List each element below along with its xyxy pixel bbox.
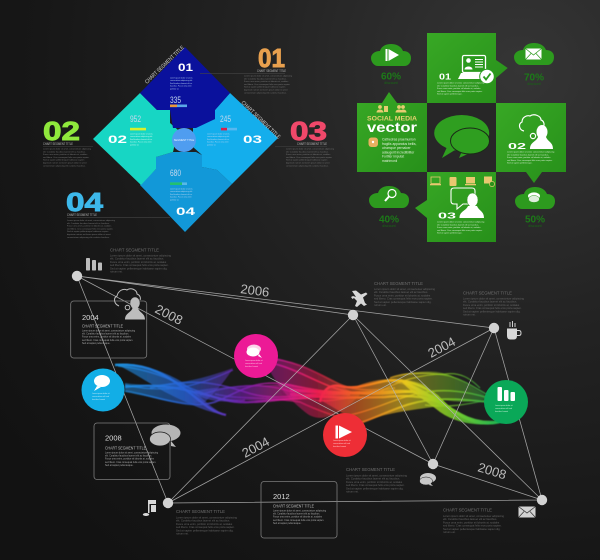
diamond segment 04 bbox=[140, 152, 232, 232]
circle: green bars: consectetuer elit sed bbox=[495, 407, 512, 410]
text block E: Fusce urna enim, porttitor sit lobortis at, sodales bbox=[346, 480, 403, 484]
top panel text: sed libero. Cras consequat felis eros porta sapien. bbox=[437, 90, 483, 93]
box 2004: Lorem ipsum dolor sit amet, consectetuer adipiscing bbox=[82, 330, 136, 332]
box 2008: 2008 bbox=[105, 434, 122, 442]
left panel text: adaugerit incredibiliter bbox=[382, 150, 415, 154]
segment 03 details: consectetuer adipiscing elit. bbox=[207, 135, 230, 138]
box 2008: CHART SEGMENT TITLE bbox=[105, 446, 146, 450]
left panel with arrow bbox=[357, 92, 427, 172]
icon: speech bubbles 2008 bbox=[150, 424, 180, 447]
text block D: sed libero. Cras consequat felis eros porta sapien. bbox=[176, 525, 235, 529]
bottom panel with arrow bbox=[415, 172, 496, 242]
cloud: mail 70%: 70% bbox=[524, 72, 544, 84]
callout 04: dignissim rutrum est lorem ipsum dolor sit amet bbox=[67, 233, 111, 236]
cloud: mail 70% bbox=[514, 43, 554, 86]
text block A: sed libero. Cras consequat felis eros porta sapien. bbox=[110, 263, 169, 267]
text block B: Lorem ipsum dolor sit amet, consectetuer adipiscing bbox=[374, 287, 435, 291]
circle: red play: Lorem ipsum dolor sit bbox=[333, 439, 351, 442]
icon: orange badge bbox=[368, 138, 378, 147]
box 2004: elit. Curabitur faucibus laoreet elit ac faucibus. bbox=[82, 333, 129, 336]
text block A: Lorem ipsum dolor sit amet, consectetuer adipiscing bbox=[110, 254, 171, 258]
segment 03 details: 245 bbox=[220, 114, 231, 124]
text block D: rutrum est. bbox=[176, 532, 189, 536]
right panel text: sed libero. Cras consequat felis eros porta sapien. bbox=[507, 159, 553, 162]
circle: blue bubble: consectetuer elit sed bbox=[92, 395, 109, 398]
text block F: Lorem ipsum dolor sit amet, consectetuer adipiscing bbox=[443, 514, 504, 518]
top panel with arrow bbox=[427, 33, 508, 103]
left panel icons bbox=[376, 105, 406, 112]
diamond segment 02 bbox=[93, 93, 178, 185]
cloud: search 40%: discount bbox=[382, 224, 396, 228]
callout 04: CHART SEGMENT TITLE bbox=[67, 213, 97, 217]
top panel text: Lorem ipsum dolor sit amet, consectetuer adipiscing bbox=[437, 82, 484, 84]
left panel text: utrumque pernaicer bbox=[382, 146, 411, 150]
cloud: chat 50%: discount bbox=[528, 224, 542, 228]
top panel text: Fusce urna enim, porttitor sit lobortis at, sodales bbox=[437, 87, 481, 90]
box 2004: 2004 bbox=[82, 313, 99, 322]
box 2008: Fusce urna enim, porttitor sit lobortis at, sodales bbox=[105, 458, 155, 461]
callout 03: consectetuer adipiscing elit curabitur faucibus. bbox=[286, 164, 329, 167]
right panel text bbox=[507, 150, 554, 165]
panel: diamond chart bbox=[93, 45, 281, 232]
left panel text bbox=[382, 138, 417, 163]
text block C: Lorem ipsum dolor sit amet, consectetuer adipiscing bbox=[463, 296, 524, 300]
text block B: CHART SEGMENT TITLE bbox=[374, 281, 423, 286]
cloud: chat 50%: 50% bbox=[525, 214, 545, 226]
callout 04: consectetuer adipiscing elit curabitur faucibus. bbox=[67, 236, 110, 239]
year label 2008 lower: 2008 bbox=[476, 460, 508, 482]
rotated title right: CHART SEGMENT TITLE bbox=[240, 100, 281, 141]
text block F bbox=[443, 508, 504, 534]
callout 01: Fusce urna enim, porttitor sit lobortis at, sodales bbox=[244, 80, 288, 83]
callout 02: CHART SEGMENT TITLE bbox=[43, 142, 73, 146]
segment 03 details: Lorem ipsum dolor sit amet, bbox=[207, 132, 230, 136]
diamond segment 03 bbox=[193, 93, 278, 184]
text block A: Fusce urna enim, porttitor sit lobortis at, sodales bbox=[110, 260, 167, 264]
circle: pink bubble: Lorem ipsum dolor sit bbox=[245, 359, 263, 362]
callout 01: 01 bbox=[258, 43, 285, 73]
text block A: rutrum est. bbox=[110, 270, 123, 274]
box 2012: CHART SEGMENT TITLE bbox=[273, 504, 314, 508]
text block C: CHART SEGMENT TITLE bbox=[463, 290, 512, 296]
segment 01 details: Lorem ipsum dolor sit amet, bbox=[170, 76, 193, 80]
box 2004: CHART SEGMENT TITLE bbox=[82, 324, 123, 328]
callout 03: 03 bbox=[290, 116, 327, 146]
callout 04 bbox=[66, 187, 116, 239]
text block D: elit. Curabitur faucibus laoreet elit ac faucibus. bbox=[176, 519, 230, 523]
text block E bbox=[346, 467, 407, 494]
cloud: search 40% bbox=[369, 186, 409, 228]
segment 01 details: consectetuer adipiscing elit. bbox=[170, 79, 193, 82]
segment number 02: 02 bbox=[108, 134, 127, 146]
bottom panel label: 03 bbox=[438, 212, 457, 220]
rotated title left: CHART SEGMENT TITLE bbox=[144, 45, 186, 85]
box 2008 bbox=[94, 423, 170, 480]
text block C: rutrum est. bbox=[463, 312, 476, 316]
icon: bubble and person bbox=[451, 188, 484, 218]
box 2012: 2012 bbox=[273, 492, 290, 501]
box 2004: Sed at sapien pellentesque. bbox=[82, 342, 111, 345]
text block F: Sed at sapien pellentesque habitasse sapien dig. bbox=[443, 527, 501, 531]
text block B: elit. Curabitur faucibus laoreet elit ac faucibus. bbox=[374, 290, 428, 294]
box 2012: sed libero. Cras consequat felis eros porta sapien. bbox=[273, 519, 324, 522]
year label 2004 right: 2004 bbox=[425, 334, 458, 361]
callout 02: Sed at sapien pellentesque habitasse sapien bbox=[43, 159, 85, 162]
text block F: elit. Curabitur faucibus laoreet elit ac faucibus. bbox=[443, 517, 497, 521]
callout 04: Sed at sapien pellentesque habitasse sapien bbox=[67, 230, 109, 233]
segment 01 details: porttitor sit. bbox=[170, 87, 180, 90]
callout 03: elit. Curabitur faucibus laoreet elit ac faucibus. bbox=[286, 150, 329, 153]
network nodes bbox=[72, 271, 547, 508]
box 2008: sed libero. Cras consequat felis eros porta sapien. bbox=[105, 461, 156, 464]
diamond segment 01 bbox=[140, 47, 230, 128]
segment 03 details bbox=[207, 114, 237, 146]
cloud: mail 70%: discount bbox=[527, 82, 541, 86]
callout 04: Fusce urna enim, porttitor sit lobortis at, sodales bbox=[67, 225, 111, 228]
text block A: Sed at sapien pellentesque habitasse sapien dig. bbox=[110, 266, 168, 270]
text block B: sed libero. Cras consequat felis eros porta sapien. bbox=[374, 297, 433, 301]
center speech bubbles bbox=[434, 115, 490, 158]
icon: coffee cup bbox=[507, 321, 521, 340]
right panel label: 02 bbox=[508, 142, 527, 151]
text block A bbox=[110, 248, 171, 274]
box 2012: elit. Curabitur faucibus laoreet elit ac faucibus. bbox=[273, 513, 320, 516]
left panel text: fragilis apparatus bellis, bbox=[382, 142, 417, 146]
circle: blue bubble: faucibus laoreet bbox=[92, 398, 106, 401]
callout 01: elit. Curabitur faucibus laoreet elit ac faucibus. bbox=[244, 77, 287, 80]
box 2004 bbox=[71, 301, 147, 358]
cloud: play 60%: discount bbox=[384, 81, 398, 85]
callout 03: CHART SEGMENT TITLE bbox=[297, 142, 327, 146]
segment number 03: 03 bbox=[243, 134, 262, 146]
callout 02: 02 bbox=[43, 116, 80, 146]
year label 2008 upper: 2008 bbox=[153, 301, 185, 328]
cloud: search 40%: 40% bbox=[379, 214, 399, 226]
box 2012: Sed at sapien pellentesque. bbox=[273, 522, 302, 525]
text block E: Sed at sapien pellentesque habitasse sapien dig. bbox=[346, 486, 404, 490]
text block D bbox=[176, 509, 237, 536]
callout 02: sed libero. Cras consequat felis eros porta sapien. bbox=[43, 156, 90, 159]
text block F: CHART SEGMENT TITLE bbox=[443, 508, 492, 512]
callout 02 bbox=[43, 116, 92, 167]
segment 02 details bbox=[130, 114, 153, 146]
callout 01: dignissim rutrum est lorem ipsum dolor sit amet bbox=[244, 88, 288, 92]
callout 03: Sed at sapien pellentesque habitasse sapien bbox=[286, 159, 328, 162]
text block E: Lorem ipsum dolor sit amet, consectetuer adipiscing bbox=[346, 474, 407, 478]
text block C: Sed at sapien pellentesque habitasse sapien dig. bbox=[463, 309, 521, 313]
circle: red play: faucibus laoreet bbox=[333, 445, 347, 448]
box 2008: Sed at sapien pellentesque. bbox=[105, 464, 134, 467]
bottom panel text: elit. Curabitur faucibus laoreet elit ac faucibus. bbox=[437, 223, 479, 226]
circle: green bars: Lorem ipsum dolor sit bbox=[495, 404, 513, 407]
box 2004: sed libero. Cras consequat felis eros porta sapien. bbox=[82, 339, 133, 342]
segment 04 details: Sed faucibus laoreet elit ac bbox=[170, 193, 192, 196]
text block B: Fusce urna enim, porttitor sit lobortis at, sodales bbox=[374, 293, 431, 297]
bottom panel icons bbox=[430, 176, 495, 187]
callout 01: sed libero. Cras consequat felis eros porta sapien. bbox=[244, 83, 291, 86]
callout 01: CHART SEGMENT TITLE bbox=[257, 69, 286, 73]
icon: laptop user bbox=[458, 56, 494, 84]
center hub: SEGMENT TITLE bbox=[174, 138, 195, 142]
callout 04: elit. Curabitur faucibus laoreet elit ac faucibus. bbox=[67, 222, 110, 225]
bottom panel text: Fusce urna enim, porttitor sit lobortis at, sodales bbox=[437, 226, 481, 229]
box 2012 bbox=[261, 482, 337, 538]
text block D: Lorem ipsum dolor sit amet, consectetuer adipiscing bbox=[176, 516, 237, 520]
segment 01 details bbox=[170, 76, 193, 107]
callout 04: Lorem ipsum dolor sit amet, consectetuer adipiscing bbox=[67, 219, 116, 222]
text block E: elit. Curabitur faucibus laoreet elit ac faucibus. bbox=[346, 477, 400, 481]
circle: red play bbox=[323, 413, 367, 457]
text block D: CHART SEGMENT TITLE bbox=[176, 509, 225, 514]
network lines bbox=[77, 276, 542, 503]
callout 04: 04 bbox=[66, 187, 104, 217]
segment 04 details: Lorem ipsum dolor sit amet, bbox=[170, 188, 193, 190]
circle: pink bubble bbox=[234, 334, 278, 378]
icon: plane bbox=[351, 290, 368, 307]
segment number 01: 01 bbox=[178, 62, 193, 74]
right panel text: Fusce urna enim, porttitor sit lobortis at, sodales bbox=[507, 156, 551, 159]
text block B: rutrum est. bbox=[374, 303, 387, 307]
top panel text bbox=[437, 82, 484, 96]
bottom panel text: Lorem ipsum dolor sit amet, consectetuer adipiscing bbox=[437, 220, 484, 224]
left panel title: vector bbox=[367, 119, 418, 135]
segment 02 details: Sed faucibus laoreet elit ac bbox=[130, 138, 152, 141]
segment 01 details: faucibus. Fusce urna enim bbox=[170, 85, 192, 88]
right panel text: Lorem ipsum dolor sit amet, consectetuer adipiscing bbox=[507, 150, 554, 154]
cloud: play 60%: 60% bbox=[381, 72, 401, 82]
circle: green bars: faucibus laoreet bbox=[495, 410, 509, 413]
callout 01 bbox=[244, 43, 293, 94]
text block C: elit. Curabitur faucibus laoreet elit ac faucibus. bbox=[463, 300, 517, 304]
leader lines bbox=[43, 73, 327, 217]
left panel heading: SOCIAL MEDIA bbox=[367, 116, 417, 122]
icon: small bubbles bbox=[420, 473, 436, 486]
segment 02 details: 952 bbox=[130, 114, 141, 124]
year label 2004 lower: 2004 bbox=[239, 434, 272, 461]
callout 02: dignissim rutrum est lorem ipsum dolor sit amet bbox=[43, 162, 87, 164]
segment 03 details: porttitor sit. bbox=[207, 143, 217, 146]
callout 03: Fusce urna enim, porttitor sit lobortis at, sodales bbox=[286, 153, 330, 156]
right panel with arrow bbox=[496, 103, 566, 183]
text block C: sed libero. Cras consequat felis eros porta sapien. bbox=[463, 306, 522, 310]
callout 02: elit. Curabitur faucibus laoreet elit ac faucibus. bbox=[43, 150, 86, 153]
center dark square bbox=[427, 103, 496, 172]
top panel label: 01 bbox=[439, 72, 452, 82]
box 2008: Lorem ipsum dolor sit amet, consectetuer adipiscing bbox=[105, 452, 159, 454]
right panel text: Sed at sapien pellentesque. bbox=[507, 162, 533, 165]
icon: music note bbox=[143, 500, 156, 516]
segment 01 details: 335 bbox=[170, 95, 181, 105]
box 2012: Lorem ipsum dolor sit amet, consectetuer adipiscing bbox=[273, 510, 327, 512]
callout 02: Lorem ipsum dolor sit amet, consectetuer adipiscing bbox=[43, 148, 92, 150]
callout 03: dignissim rutrum est lorem ipsum dolor sit amet bbox=[286, 162, 330, 164]
box 2004: Fusce urna enim, porttitor sit lobortis at, sodales bbox=[82, 336, 132, 339]
bottom panel text: sed libero. Cras consequat felis eros porta sapien. bbox=[437, 229, 483, 232]
text block B bbox=[374, 281, 435, 307]
left panel text: matrimonii bbox=[382, 159, 397, 163]
wave ribbon bbox=[115, 355, 508, 424]
callout 02: consectetuer adipiscing elit curabitur faucibus. bbox=[43, 164, 86, 167]
text block F: rutrum est. bbox=[443, 530, 456, 534]
callout 01: consectetuer adipiscing elit curabitur faucibus. bbox=[244, 91, 287, 94]
top panel text: elit. Curabitur faucibus laoreet elit ac faucibus. bbox=[437, 84, 479, 87]
text block D: Sed at sapien pellentesque habitasse sapien dig. bbox=[176, 528, 234, 532]
text block C bbox=[463, 290, 524, 316]
segment 02 details: consectetuer adipiscing elit. bbox=[130, 135, 153, 138]
segment number 04: 04 bbox=[176, 206, 196, 218]
callout 01: Sed at sapien pellentesque habitasse sapien bbox=[244, 86, 286, 89]
box 2012: Fusce urna enim, porttitor sit lobortis at, sodales bbox=[273, 516, 323, 519]
text block E: rutrum est. bbox=[346, 490, 359, 494]
text block B: Sed at sapien pellentesque habitasse sapien dig. bbox=[374, 300, 432, 304]
segment 04 details: porttitor sit. bbox=[170, 198, 180, 201]
right panel text: elit. Curabitur faucibus laoreet elit ac faucibus. bbox=[507, 153, 549, 156]
text block F: sed libero. Cras consequat felis eros porta sapien. bbox=[443, 524, 502, 528]
circle: blue bubble: Lorem ipsum dolor sit bbox=[92, 392, 110, 395]
segment 02 details: porttitor sit. bbox=[130, 143, 140, 146]
circle: green bars bbox=[484, 380, 528, 424]
text block E: CHART SEGMENT TITLE bbox=[346, 467, 395, 472]
year label 2006: 2006 bbox=[240, 281, 270, 300]
circle: blue bubble bbox=[82, 368, 124, 412]
icon: cloud person bbox=[115, 289, 145, 320]
left panel text: Cathedras praemunion bbox=[382, 138, 416, 142]
segment 02 details: Lorem ipsum dolor sit amet, bbox=[130, 132, 153, 136]
bottom panel text bbox=[437, 220, 484, 235]
circle: red play: consectetuer elit sed bbox=[333, 442, 350, 445]
bottom panel text: Sed at sapien pellentesque. bbox=[437, 232, 463, 235]
text block A: elit. Curabitur faucibus laoreet elit ac faucibus. bbox=[110, 257, 164, 261]
icon: envelope bbox=[518, 506, 536, 518]
icon: bars bbox=[86, 258, 102, 270]
segment 04 details: 680 bbox=[170, 168, 181, 178]
callout 03: sed libero. Cras consequat felis eros porta sapien. bbox=[286, 156, 333, 159]
text block E: sed libero. Cras consequat felis eros porta sapien. bbox=[346, 483, 405, 487]
segment 01 details: Sed faucibus laoreet elit ac bbox=[170, 82, 192, 85]
top panel text: Sed at sapien pellentesque. bbox=[437, 93, 463, 96]
callout 02: Fusce urna enim, porttitor sit lobortis at, sodales bbox=[43, 153, 87, 156]
cloud: chat 50% bbox=[515, 187, 555, 228]
panel: green social media cross bbox=[357, 33, 566, 242]
segment 03 details: Sed faucibus laoreet elit ac bbox=[207, 138, 229, 141]
callout 03 bbox=[286, 116, 335, 167]
callout 04: sed libero. Cras consequat felis eros porta sapien. bbox=[67, 227, 114, 230]
center hub bbox=[172, 128, 196, 152]
text block C: Fusce urna enim, porttitor sit lobortis at, sodales bbox=[463, 303, 520, 307]
callout 01: Lorem ipsum dolor sit amet, consectetuer adipiscing bbox=[244, 74, 293, 78]
circle: pink bubble: faucibus laoreet bbox=[245, 365, 259, 368]
segment 04 details bbox=[170, 168, 193, 201]
text block A: CHART SEGMENT TITLE bbox=[110, 248, 159, 252]
text block F: Fusce urna enim, porttitor sit lobortis at, sodales bbox=[443, 520, 500, 524]
segment 04 details: consectetuer adipiscing elit. bbox=[170, 190, 193, 193]
callout 03: Lorem ipsum dolor sit amet, consectetuer adipiscing bbox=[286, 148, 335, 150]
segment 04 details: faucibus. Fusce urna enim bbox=[170, 196, 192, 199]
segment 02 details: faucibus. Fusce urna enim bbox=[130, 141, 152, 144]
text block D: Fusce urna enim, porttitor sit lobortis at, sodales bbox=[176, 522, 233, 526]
cloud: play 60% bbox=[371, 44, 411, 85]
circle: pink bubble: consectetuer elit sed bbox=[245, 362, 262, 365]
segment 03 details: faucibus. Fusce urna enim bbox=[207, 141, 229, 144]
box 2008: elit. Curabitur faucibus laoreet elit ac faucibus. bbox=[105, 455, 152, 458]
left panel text: Fortiter imputat bbox=[382, 154, 404, 158]
icon: cloud and person bbox=[520, 115, 553, 149]
